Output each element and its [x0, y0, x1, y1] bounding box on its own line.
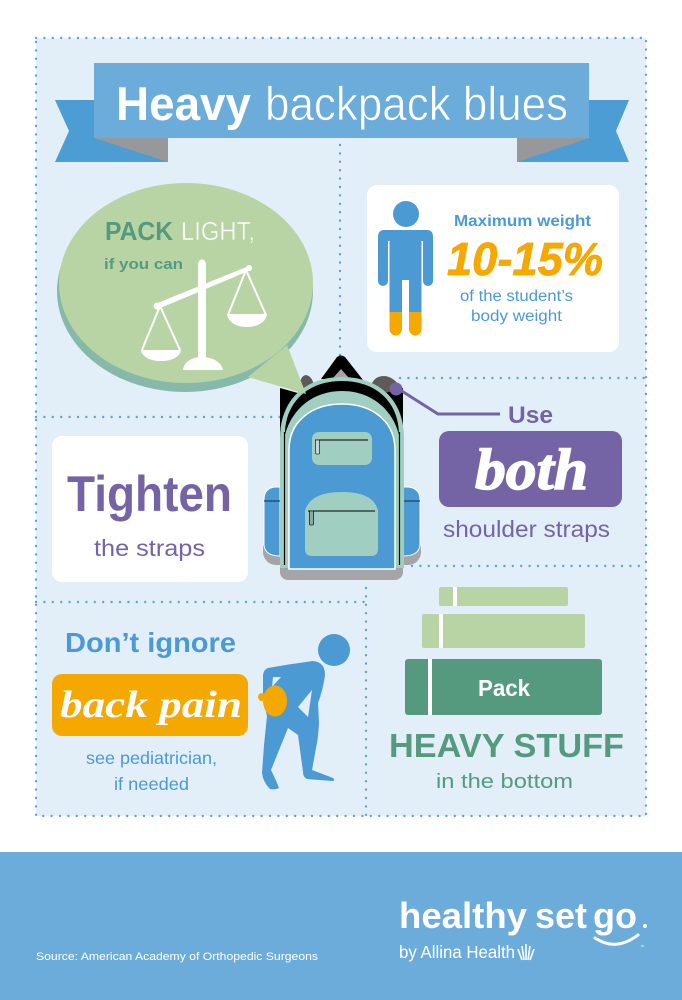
- callout: back pain: back pain: [60, 684, 242, 726]
- callout: both: both: [475, 437, 588, 502]
- text: the straps: the straps: [94, 535, 205, 561]
- banner left tail: [55, 100, 168, 162]
- lower pocket: [305, 492, 378, 556]
- illustration: backpack: [263, 356, 421, 580]
- callout: both: [439, 431, 622, 507]
- logo: healthy set go: ™: [640, 944, 644, 949]
- heading: pack light: LIGHT,: [181, 216, 255, 246]
- panel: pack light speech bubble: [57, 183, 313, 394]
- logo: healthy set go: go: [593, 895, 637, 936]
- icon: book stack: Pack: [478, 675, 530, 701]
- logo: healthy set go: [399, 895, 647, 962]
- panel: tighten the straps card: [52, 436, 248, 582]
- title: backpack blues: [265, 77, 568, 130]
- backpack shadow: [263, 535, 421, 580]
- text: of the student's body weight: body weight: [471, 308, 563, 325]
- top handle and straps: [280, 356, 403, 470]
- logo: healthy set go: set: [535, 895, 587, 936]
- text: maximum weight: Maximum weight: [454, 213, 592, 230]
- title banner: [55, 63, 629, 162]
- title: Heavy: [116, 77, 251, 130]
- panel: use both shoulder straps: [390, 382, 622, 542]
- text: in the bottom: in the bottom: [436, 771, 573, 793]
- panel: pack heavy stuff in the bottom: [389, 587, 624, 793]
- text: see pediatrician: [86, 748, 217, 794]
- icon: person with back pain: [258, 634, 350, 789]
- text: use: Use: [508, 402, 553, 429]
- text: shoulder straps: shoulder straps: [443, 516, 610, 542]
- text: see pediatrician: see pediatrician,: [86, 748, 217, 768]
- banner right tail: [517, 100, 629, 162]
- backpack front panel: [289, 404, 395, 569]
- text: if you can: if you can: [104, 256, 183, 273]
- callout: back pain: [52, 674, 248, 736]
- upper pocket: [312, 432, 372, 465]
- panel: don't ignore back pain: [52, 627, 350, 794]
- footer: [0, 852, 682, 1000]
- backpack body: [280, 377, 404, 568]
- stat: 10-15%: 10-15%: [447, 233, 603, 285]
- heading: pack light: PACK: [105, 216, 173, 246]
- text: of the student's body weight: [460, 288, 573, 325]
- logo: healthy set go: by Allina Health: [399, 942, 515, 962]
- panel: maximum weight card: [367, 185, 619, 352]
- heading: heavy stuff: HEAVY STUFF: [389, 727, 624, 764]
- logo: healthy set go: healthy: [399, 895, 528, 936]
- heading: don't ignore: Don’t ignore: [65, 627, 236, 658]
- text: of the student's body weight: of the student’s: [460, 288, 573, 305]
- icon: balance scale: [141, 260, 267, 370]
- side pockets: [264, 487, 420, 556]
- connector line: [390, 382, 500, 414]
- text: see pediatrician: if needed: [114, 774, 189, 794]
- icon: person: [378, 201, 433, 336]
- source: Source: American Academy of Orthopedic Surgeons: [36, 951, 319, 963]
- icon: book stack: [405, 587, 602, 715]
- heading: tighten: Tighten: [67, 466, 232, 522]
